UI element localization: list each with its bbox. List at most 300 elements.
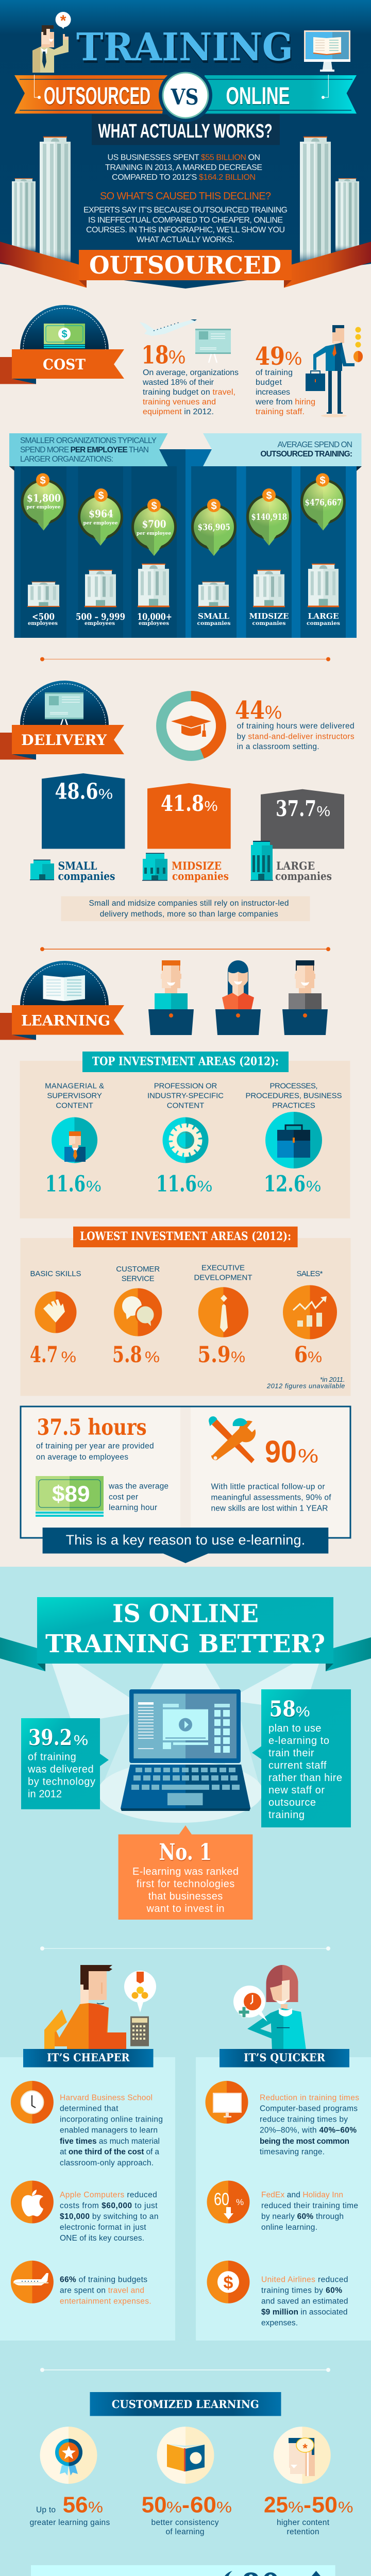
banner: smaller organizations: SPEND MORE PER EMPLOYEE THAN [20,446,149,454]
column: large companies: $ [319,475,326,486]
header panel [0,0,371,289]
stat: 56%: % [88,2499,103,2516]
stat: $89: $89 [52,1481,90,1506]
icon: pointing hand [35,1291,76,1333]
bar: small companies: 48.6 [55,779,98,804]
divider [40,2368,330,2372]
stat: 90% [211,1435,331,1513]
icon: apple [11,2180,54,2224]
item: harvard: Harvard Business School [60,2094,153,2103]
bar: midsize companies: 41.8 [161,791,204,816]
column: small companies: $ [211,501,217,512]
icon: 60 percent down [207,2180,249,2224]
item: apple: costs from $60,000 to just [60,2201,158,2210]
stat: 90%: meaningful assessments, 90% of [211,1493,331,1502]
header [73,1227,298,1247]
item: harvard: incorporating online training [60,2115,163,2124]
item: apple: electronic format in just [60,2223,146,2232]
column: large companies: LARGE [308,612,339,621]
item: harvard: five times as much material [60,2137,160,2146]
stat: 49% [255,342,315,416]
icon: calculator [130,2016,149,2046]
intro text: COMPARED TO 2012’S $164.2 BILLION [112,173,256,182]
section banner: outsourced [0,242,371,287]
label: midsize companies: companies [172,870,229,883]
callout: 39.2%: by technology [28,1776,95,1788]
item: harvard: at one third of the cost of a [60,2147,159,2156]
stat: 25%-50%: higher content [277,2518,330,2527]
item: reduction: 20%–80%, with 40%–60% [260,2126,357,2135]
stat: 44%: of training hours were delivered [237,722,355,731]
panel: hours and skills lost [21,1406,350,1538]
footnote: *in 2011. [320,1376,345,1383]
icon: book [167,2444,205,2471]
column: 500 to 9,999 employees: $ [98,490,104,502]
note: instructor-led: delivery methods, more so than large companies [100,910,278,919]
icon: banknote: $ [61,329,68,340]
spotlight beams [52,1664,319,1792]
banner: key reason: This is a key reason to use e-learning. [66,1532,305,1548]
icon: down arrow [216,2571,237,2576]
stat: 44%: by stand-and-deliver instructors [237,733,355,741]
stat: 25%-50%: 50 [312,2493,338,2518]
footnote: 2012 figures unavailable [266,1382,345,1390]
column: customer service: SERVICE [122,1275,155,1283]
column: small companies: $36,905 [198,522,230,533]
column: it's cheaper [11,2049,163,2306]
column: under 500 employees: $1,800 [27,492,61,504]
column: executive development [194,1264,252,1368]
stat: 49%: of training [256,368,293,377]
column: executive development: % [231,1349,245,1366]
item: harvard: determined that [60,2105,119,2113]
column: sales: % [308,1349,322,1366]
column: customer service: % [145,1349,160,1366]
callout: 39.2%: of training [28,1752,76,1763]
column: midsize companies: $140,918 [251,512,287,522]
badge: delivery [0,681,124,759]
label: small companies: SMALL [58,859,97,872]
panel: per-employee and average spend [9,433,362,638]
section banner: is online training better [0,1597,371,1671]
badge: learning: LEARNING [21,1012,110,1029]
ribbon: online: ONLINE [226,82,290,109]
column: small companies: SMALL [198,612,229,621]
callout: return on investment 80% [31,2565,335,2576]
label: small companies: companies [58,870,115,883]
item: reduction: being the most common [260,2137,349,2146]
label: large companies: companies [275,870,332,883]
column: processes: 12.6 [264,1172,306,1197]
stat: 25%-50%: % [338,2499,353,2516]
callout: 58%: train their [268,1748,314,1759]
footnote [266,1376,345,1390]
icon: open book [43,975,85,1001]
column: managerial: 11.6 [45,1172,86,1197]
callout: 39.2%: in 2012 [28,1789,62,1800]
column: managerial: CONTENT [56,1101,93,1110]
stat: 56%: 56 [63,2493,88,2518]
stat: 50%-60%: 60 [190,2493,216,2518]
item: united: training times by 60% [261,2286,342,2295]
divider [40,947,330,951]
column: it's quicker [205,2049,359,2328]
stat: 50%-60%: of learning [166,2528,204,2536]
panel: lowest investment areas [21,1227,350,1396]
icon: speech bubbles [114,1288,162,1336]
skyline towers [12,137,359,262]
column: large companies [300,473,346,626]
column: sales: SALES* [297,1269,323,1278]
icon: banknote [44,324,85,348]
banner: key reason [43,1528,328,1563]
ribbon: online [205,75,357,113]
icon: dollar [207,2261,249,2303]
badge: learning [0,961,124,1040]
banner: smaller organizations [9,433,168,466]
stat: 50%-60%: 50 [142,2493,167,2518]
icon: 60 percent down: 60 [214,2190,229,2209]
character: man with calculator [44,1965,156,2050]
callout: no. 1: No. 1 [159,1839,212,1866]
note: instructor-led: Small and midsize companies still rely on instructor-led [89,899,289,908]
callout: 58%: plan to use [268,1723,321,1734]
stat: 18%: training venues and [143,398,216,406]
column: customer service [112,1265,162,1368]
header [220,2049,349,2067]
icon: monitor with book [304,30,350,72]
item: fedex [207,2180,358,2232]
stat: 18%: % [168,346,185,368]
column: large companies: $476,667 [305,498,342,508]
intro text: COURSES. IN THIS INFOGRAPHIC, WE’LL SHOW YOU [86,226,285,234]
column: midsize companies: companies [252,621,286,626]
item: united: United Airlines reduced [261,2275,348,2284]
panels: cheaper and quicker background [0,2057,371,2341]
stat: 90%: With little practical follow-up or [211,1482,325,1491]
label: large companies: LARGE [276,859,315,872]
column: basic skills: 4.7 [30,1342,58,1368]
icon: up arrow [306,2571,326,2576]
bar: midsize companies: % [204,798,217,814]
column: 10,000+ employees: $ [151,501,157,512]
icon: head with brain: * [302,2442,308,2455]
column: processes: PROCESSES, [270,1082,317,1091]
stat: 49%: were from hiring [255,398,315,406]
icon: flipchart [195,329,231,363]
item: harvard [11,2081,163,2167]
column: customer service: CUSTOMER [116,1265,160,1274]
item: united: and saved an estimated [261,2297,348,2306]
icon: award [55,2439,82,2476]
callout: 58%: % [296,1704,310,1720]
stat: 44% [235,696,355,751]
icon: flipchart [45,692,83,725]
column: executive development: 5.9 [197,1342,231,1368]
icon: monitor [205,2081,248,2124]
stat: 44%: in a classroom setting. [237,742,319,751]
banner: average spend: OUTSOURCED TRAINING: [260,450,352,459]
column: profession: 11.6 [156,1172,197,1197]
stat: 25%-50%: - [303,2493,311,2518]
column: 10,000+ employees [131,499,177,626]
divider [40,657,330,662]
icon: tall teal building [250,841,273,881]
item: apple: ONE of its key courses. [60,2234,144,2243]
bar: small companies: % [98,786,113,802]
donut chart: 44% [161,696,221,756]
stat: $89: learning hour [109,1503,157,1512]
header: TOP INVESTMENT AREAS (2012): [92,1055,279,1069]
item: fedex: by nearly 60% through [261,2212,344,2221]
callout: 58%: current staff [268,1760,327,1771]
character: man with idea [32,12,71,73]
header: LOWEST INVESTMENT AREAS (2012): [80,1230,291,1243]
stat: $89: cost per [109,1493,138,1502]
column: under 500 employees: employees [28,621,58,626]
illustration: laptop [121,1689,250,1811]
column: basic skills: BASIC SKILLS [30,1269,81,1278]
item: united: $9 million in associated [261,2308,347,2316]
column: managerial: MANAGERIAL & [45,1082,104,1091]
column: processes: PROCEDURES, BUSINESS [245,1091,342,1100]
label: small companies [30,859,115,883]
callout: 39.2%: % [74,1732,88,1748]
bar: midsize companies [147,783,231,849]
section banner: outsourced: OUTSOURCED [89,251,281,280]
column: basic skills: % [61,1349,76,1366]
stat: 18%: training budget on travel, [143,388,235,397]
column: profession [147,1082,224,1197]
subtitle: WHAT ACTUALLY WORKS? [98,121,272,142]
vs badge: VS [171,84,199,110]
callout: no. 1: first for technologies [137,1878,234,1890]
column: under 500 employees: $ [40,475,46,486]
callout: 58%: new staff or [268,1785,325,1796]
title: TRAINING [76,25,293,70]
stat: 90%: new skills are lost within 1 YEAR [211,1504,328,1513]
icon: small teal building [30,859,54,880]
stat: 90%: 90 [265,1435,297,1469]
stat: 90%: % [298,1446,318,1467]
stat: $89: was the average [108,1482,168,1491]
stat: 18%: 18 [141,341,169,370]
intro text: EXPERTS SAY IT’S BECAUSE OUTSOURCED TRAINING [83,206,288,214]
item: travel [11,2261,151,2306]
item: united [207,2261,348,2328]
column: sales [283,1269,337,1368]
column: managerial: % [86,1178,101,1195]
stat: 50%-60%: % [216,2499,232,2516]
stat: 37.5 hours: on average to employees [36,1453,128,1462]
item: fedex: reduced their training time [261,2201,358,2210]
stat: 37.5 hours [36,1415,154,1462]
item: fedex: online learning. [261,2223,317,2232]
header [90,2392,281,2416]
header [82,1052,289,1072]
column: processes: % [306,1178,321,1195]
column: basic skills [30,1269,81,1368]
icon: briefcase [265,1112,322,1168]
stat: 44%: 44 [235,696,265,725]
stat: 18%: wasted 18% of their [142,378,214,387]
column: profession: CONTENT [167,1101,204,1110]
column: small companies [191,499,237,626]
callout: 39.2%: 39.2 [28,1725,72,1750]
column backgrounds [21,466,346,638]
characters: three learners at laptops [148,960,328,1035]
stat: 56%: Up to [36,2506,56,2515]
header: IT’S CHEAPER [47,2051,130,2064]
bar: large companies [261,789,344,849]
column: 10,000+ employees: 10,000+ [137,612,172,622]
bubble: clock plus [233,1986,267,2022]
divider [40,1946,330,1951]
label: midsize companies [142,853,229,883]
item: fedex: FedEx and Holiday Inn [261,2191,343,2199]
intro text: TRAINING IN 2013, A MARKED DECREASE [105,163,262,172]
bar: small companies [42,773,125,849]
character: man with idea: * [60,12,66,29]
column: profession: % [197,1178,212,1195]
column: 500 to 9,999 employees: 500 – 9,999 [76,612,125,622]
callout: 58%: training [268,1809,305,1821]
column: 10,000+ employees: employees [139,621,169,626]
icon: banknote [36,1476,104,1517]
section banner: is online training better: TRAINING BETTER? [45,1630,325,1658]
vs badge [159,69,212,122]
item: reduction: Reduction in training times [260,2094,359,2103]
banner: smaller organizations: LARGER ORGANIZATIONS: [20,455,113,464]
stat: 25%-50% [264,312,353,2536]
callout: 39.2%: was delivered [27,1764,94,1775]
stat: 44%: % [265,702,282,723]
icon: wrench and screwdriver [209,1416,256,1463]
column: midsize companies: MIDSIZE [249,612,289,621]
ribbon: outsourced: OUTSOURCED [44,82,150,109]
stat: 49%: 49 [255,342,285,371]
column: processes [245,1082,342,1197]
callout: 58%: outsource [268,1797,316,1808]
item: harvard: classroom-only approach. [60,2159,154,2167]
icon: midsize teal building [142,853,167,881]
ribbon: outsourced [14,75,167,113]
stat: 18%: equipment in 2012. [143,408,214,416]
column: profession: INDUSTRY-SPECIFIC [147,1091,224,1100]
column: 10,000+ employees: per employee [137,531,171,536]
label: large companies [250,841,332,883]
icon: manager [52,1117,97,1163]
column: profession: PROFESSION OR [154,1082,217,1091]
icon: dollar: $ [224,2273,233,2293]
subtitle [92,114,280,145]
online section background [0,1567,371,2576]
callout: 58%: 58 [269,1697,296,1722]
bar: large companies: 37.7 [276,796,316,821]
callout: 58%: rather than hire [268,1772,342,1784]
column: under 500 employees: <500 [32,612,55,622]
stat: 25%-50%: % [288,2499,303,2516]
column: 500 to 9,999 employees [76,488,125,626]
column: midsize companies [246,488,292,626]
item: reduction: reduce training times by [260,2115,348,2124]
column: small companies: companies [197,621,231,626]
bubble: money down [124,1971,156,2012]
stat: 49%: % [285,348,302,369]
callout: 39.2% [21,1718,109,1809]
stat: 37.5 hours: of training per year are provided [36,1442,154,1451]
header [23,2049,154,2067]
intro text: WHAT ACTUALLY WORKS. [137,235,234,244]
intro text [83,154,288,244]
column: large companies: companies [307,621,340,626]
stat: 25%-50%: retention [286,2528,319,2536]
stat: 18%: On average, organizations [143,368,239,377]
intro text: SO WHAT’S CAUSED THIS DECLINE? [100,191,271,202]
item: travel: 66% of training budgets [60,2275,147,2284]
stat: 37.5 hours: 37.5 hours [37,1415,147,1440]
icon: sales chart [283,1285,337,1340]
header: IT’S QUICKER [244,2051,326,2064]
column: 10,000+ employees: $700 [142,518,166,530]
column: 500 to 9,999 employees: employees [85,621,115,626]
stat: 50%-60%: % [166,2499,182,2516]
column: under 500 employees [21,473,66,626]
icon: clock [11,2081,54,2124]
intro text: IS INEFFECTUAL COMPARED TO CHEAPER, ONLINE [88,216,283,225]
banner: average spend [203,433,362,466]
panel: top investment areas [20,1052,350,1218]
callout: no. 1 [119,1825,252,1920]
bar: large companies: % [316,803,330,819]
icon: plane [11,2261,54,2303]
stat: 50%-60%: better consistency [151,2518,219,2527]
callout: 58% [252,1689,351,1827]
item: travel: are spent on travel and [60,2286,144,2295]
callout: no. 1: E-learning was ranked [132,1866,239,1877]
item: travel: entertainment expenses. [60,2297,151,2306]
section banner: is online training better: IS ONLINE [112,1599,259,1628]
label: midsize companies: MIDSIZE [172,859,222,872]
column: managerial: SUPERVISORY [47,1091,102,1100]
header: CUSTOMIZED LEARNING [112,2398,259,2411]
column: executive development: EXECUTIVE [201,1264,245,1273]
stat: 50%-60%: - [182,2493,190,2518]
character: woman with watch [233,1965,306,2050]
column: 500 to 9,999 employees: per employee [83,520,117,526]
stat: 18% [141,341,239,416]
item: apple: Apple Computers reduced [60,2191,157,2199]
callout: 58%: e-learning to [268,1735,329,1747]
note: instructor-led [61,896,310,921]
item: harvard: enabled managers to learn [60,2126,158,2135]
stat: $89 [36,1476,168,1517]
item: reduction: timesaving range. [260,2147,325,2156]
stat: 49%: budget [256,378,282,387]
item: reduction [205,2081,359,2156]
stat: 50%-60% [142,2427,232,2536]
item: reduction: Computer-based programs [260,2105,358,2113]
icon: airplane [140,319,197,336]
column: managerial [45,1082,104,1197]
badge: cost: COST [43,356,86,373]
stat: 49%: training staff. [256,408,305,416]
spotlight pool [98,1761,263,1823]
column: executive development: DEVELOPMENT [194,1274,252,1282]
intro text: US BUSINESSES SPENT $55 BILLION ON [107,154,260,162]
icon: 60 percent down: % [236,2197,244,2207]
column: sales: 6 [294,1342,308,1368]
